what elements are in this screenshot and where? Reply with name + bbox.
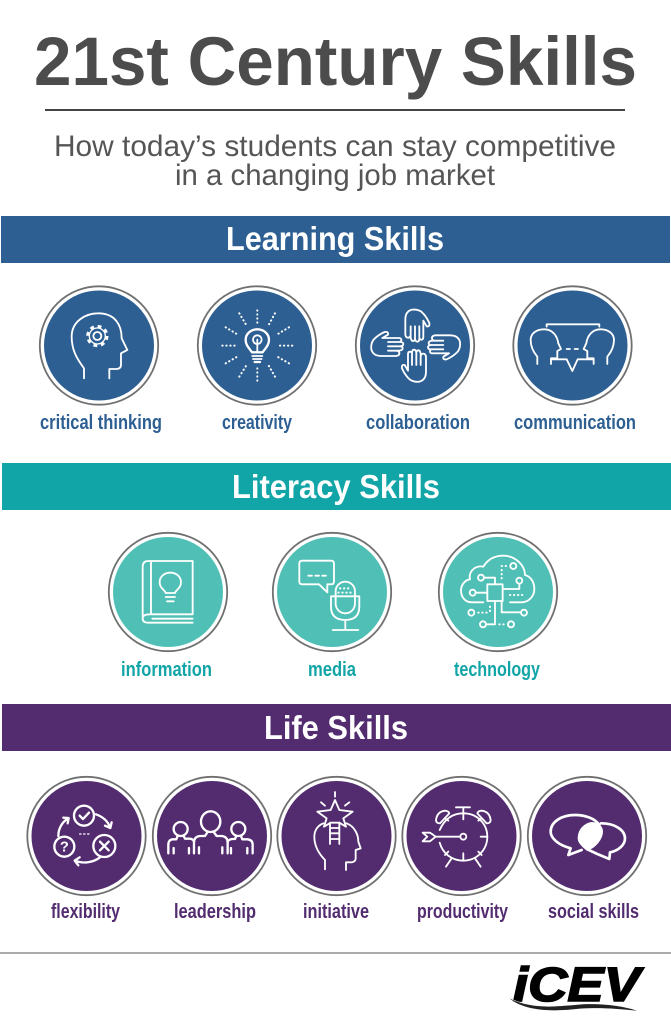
logo: iCEV: iCEV <box>513 959 645 1012</box>
label: initiative <box>303 901 369 923</box>
label: collaboration <box>366 412 470 434</box>
label: social skills <box>548 901 639 923</box>
label: flexibility <box>51 901 121 923</box>
icon: cycle of check, cross and question <box>54 806 115 865</box>
panel: literacy skills <box>2 463 671 681</box>
label: critical thinking <box>40 412 162 434</box>
panel: learning skills <box>1 216 670 434</box>
label: communication <box>514 412 636 434</box>
label: creativity <box>222 412 293 434</box>
title: 21st Century Skills <box>34 23 637 100</box>
icon: head with ladder and star <box>314 792 361 870</box>
icon: head with gear <box>72 313 127 378</box>
panel: life skills <box>2 704 671 923</box>
heading: learning skills <box>1 216 670 263</box>
label: media <box>308 659 357 681</box>
heading: literacy skills: Literacy Skills <box>232 468 440 505</box>
subtitle: How today’s students can stay competitive <box>54 130 616 163</box>
icon: two heads talking <box>531 324 614 371</box>
heading: learning skills: Learning Skills <box>226 220 444 257</box>
social skills <box>528 777 646 923</box>
subtitle: in a changing job market <box>175 159 496 192</box>
heading: life skills: Life Skills <box>264 709 408 746</box>
footer divider <box>0 952 671 954</box>
collaboration <box>356 286 474 434</box>
critical thinking <box>40 286 162 434</box>
label: technology <box>454 659 541 681</box>
initiative <box>277 777 396 923</box>
icon: four hands <box>371 310 460 382</box>
icon: alarm clock with arrow <box>423 807 491 867</box>
icon: cloud circuit <box>461 556 534 627</box>
information <box>109 533 227 681</box>
label: productivity <box>417 901 509 923</box>
icon: book with bulb <box>143 561 193 623</box>
media <box>273 533 391 681</box>
icon: group of three people <box>168 811 253 853</box>
flexibility <box>27 777 146 923</box>
icon: light bulb <box>222 310 293 381</box>
creativity <box>198 286 316 434</box>
productivity <box>402 777 521 923</box>
label: information <box>121 659 212 681</box>
technology <box>439 533 557 681</box>
title rule <box>45 109 625 111</box>
heading: literacy skills <box>2 463 671 510</box>
communication <box>513 286 636 434</box>
leadership <box>153 777 271 923</box>
icon: speech bubble and microphone <box>299 561 359 630</box>
icon: cycle of check, cross and question: ? <box>60 840 69 856</box>
icon: overlapping speech bubbles <box>551 815 625 859</box>
label: leadership <box>174 901 256 923</box>
heading: life skills <box>2 704 671 751</box>
